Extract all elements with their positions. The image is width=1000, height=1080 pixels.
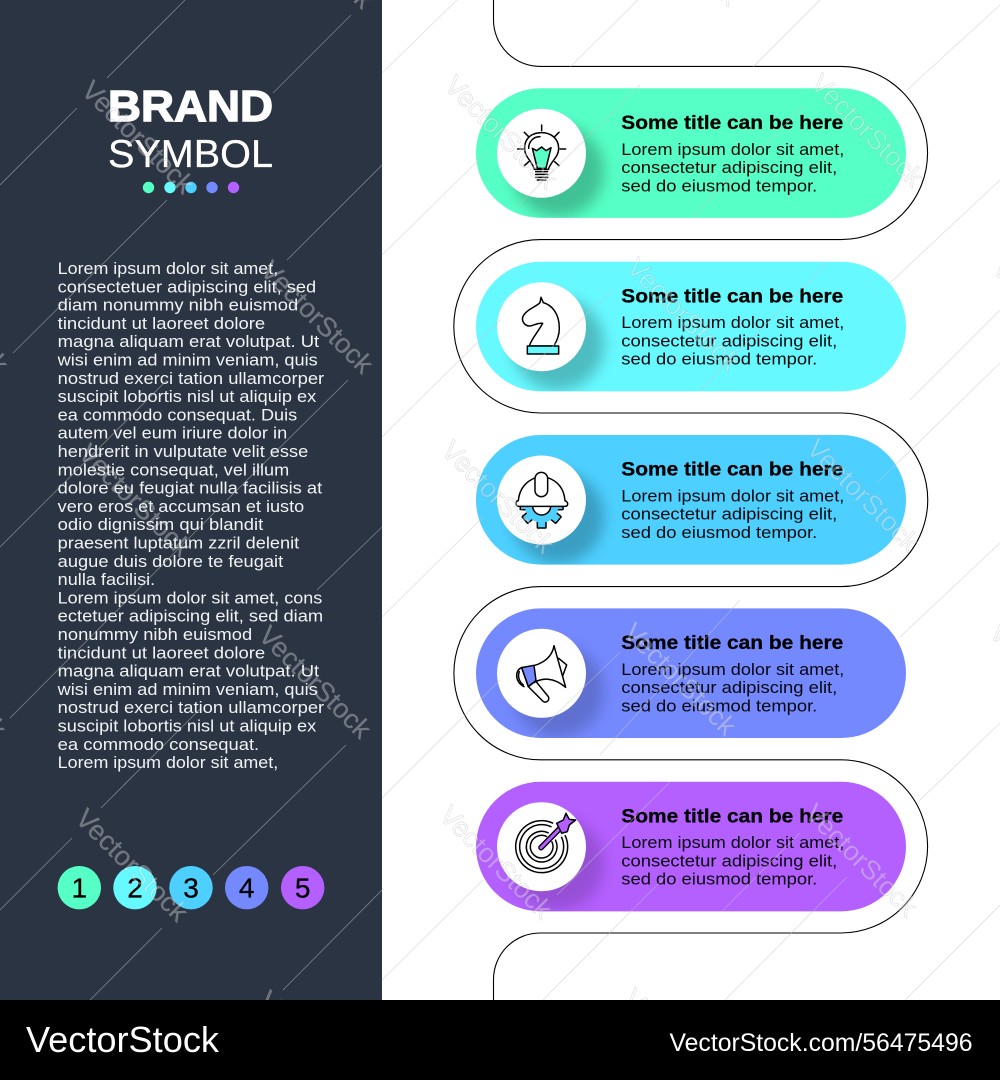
card 4: sed do eiusmod tempor. (621, 697, 817, 715)
text: VectorStock (436, 435, 561, 560)
sidebar body text: hendrerit in vulputate velit esse (58, 443, 308, 461)
card 1: consectetur adipiscing elit, (621, 159, 837, 177)
sidebar body text: suscipit lobortis nisl ut aliquip ex (58, 718, 316, 736)
sidebar body text: autem vel eum iriure dolor in (58, 425, 287, 443)
sidebar body text: nonummy nibh euismod (58, 626, 252, 644)
icon: light bulb (518, 125, 566, 180)
footer bar: VectorStock (26, 1019, 220, 1060)
sidebar body text: Lorem ipsum dolor sit amet, (58, 754, 278, 772)
sidebar body text: ea commodo consequat. (58, 736, 259, 754)
sidebar body text: nulla facilisi. (58, 571, 155, 589)
brand heading (108, 82, 273, 176)
sidebar body text: Lorem ipsum dolor sit amet, (58, 260, 278, 278)
card 3: consectetur adipiscing elit, (621, 506, 837, 524)
sidebar body text: ectetuer adipiscing elit, sed diam (58, 608, 323, 626)
card 5 (476, 782, 906, 911)
sidebar body text: dolore eu feugiat nulla facilisis at (58, 480, 323, 498)
sidebar body text: magna aliquam erat volutpat. Ut (58, 663, 320, 681)
brand heading: BRAND (108, 82, 273, 131)
numbered legend: 4 (239, 873, 254, 904)
icon: megaphone (517, 646, 567, 702)
card 3 (476, 435, 906, 565)
sidebar body text: nostrud exerci tation ullamcorper (58, 699, 325, 717)
text: VectorStock (76, 75, 201, 200)
footer bar: VectorStock.com/56475496 (670, 1029, 972, 1057)
sidebar body text: praesent luptatum zzril delenit (58, 534, 300, 552)
card 1 (476, 88, 906, 218)
icon: chess knight (522, 297, 559, 354)
sidebar body text (57, 260, 325, 772)
card 4 (476, 608, 906, 738)
numbered legend: 2 (127, 873, 143, 904)
text: VectorStock (621, 252, 746, 377)
sidebar body text: ea commodo consequat. Duis (58, 406, 297, 424)
numbered legend: 3 (183, 873, 199, 904)
text: VectorStock (618, 617, 743, 742)
numbered legend (58, 866, 324, 909)
card 1: sed do eiusmod tempor. (621, 177, 817, 195)
text: VectorStock (439, 70, 564, 195)
sidebar body text: Lorem ipsum dolor sit amet, cons (58, 589, 322, 607)
card 1: Some title can be here (621, 112, 843, 134)
footer bar (0, 1000, 1000, 1080)
text: VectorStock (255, 255, 380, 380)
numbered legend: 1 (72, 873, 87, 904)
text: VectorStock (801, 433, 926, 558)
sidebar body text: consectetuer adipiscing elit, sed (58, 278, 316, 296)
card 3: Some title can be here (621, 459, 843, 481)
sidebar body text: magna aliquam erat volutpat. Ut (58, 333, 320, 351)
sidebar body text: augue duis dolore te feugait (58, 553, 284, 571)
brand heading: SYMBOL (108, 133, 273, 176)
sidebar body text: tincidunt ut laoreet dolore (58, 644, 265, 662)
card 4: Lorem ipsum dolor sit amet, (621, 661, 844, 679)
card 5: consectetur adipiscing elit, (621, 852, 837, 870)
sidebar body text: tincidunt ut laoreet dolore (58, 315, 265, 333)
card 5: Lorem ipsum dolor sit amet, (621, 834, 844, 852)
card 5: Some title can be here (621, 805, 843, 827)
card 3: Lorem ipsum dolor sit amet, (621, 487, 844, 505)
icon: target with arrow (516, 813, 576, 873)
text: VectorStock (805, 68, 930, 193)
panel: dark sidebar (0, 0, 382, 1000)
text: VectorStock (73, 438, 198, 563)
card 2: Some title can be here (621, 285, 843, 307)
card 2 (476, 262, 906, 391)
sidebar body text: nostrud exerci tation ullamcorper (58, 370, 325, 388)
sidebar body text: wisi enim ad minim veniam, quis (57, 681, 318, 699)
text: VectorStock (253, 620, 378, 745)
sidebar body text: suscipit lobortis nisl ut aliquip ex (58, 388, 316, 406)
card 3: sed do eiusmod tempor. (621, 524, 817, 542)
text: VectorStock (434, 800, 559, 925)
sidebar body text: diam nonummy nibh euismod (58, 297, 298, 315)
text: VectorStock (799, 798, 924, 923)
card 2: Lorem ipsum dolor sit amet, (621, 314, 844, 332)
sidebar body text: odio dignissim qui blandit (58, 516, 264, 534)
card 4: consectetur adipiscing elit, (621, 679, 837, 697)
icon: helmet and gear (516, 472, 568, 528)
sidebar body text: wisi enim ad minim veniam, quis (57, 352, 318, 370)
sidebar body text: molestie consequat, vel illum (58, 461, 289, 479)
card 1: Lorem ipsum dolor sit amet, (621, 141, 844, 159)
card 2: sed do eiusmod tempor. (621, 351, 817, 369)
connector line snaking behind the cards (454, 0, 928, 1000)
card 2: consectetur adipiscing elit, (621, 332, 837, 350)
sidebar body text: vero eros et accumsan et iusto (58, 498, 304, 516)
colour dots (143, 182, 239, 193)
card 5: sed do eiusmod tempor. (621, 871, 817, 889)
card 4: Some title can be here (621, 632, 843, 654)
text: VectorStock (70, 803, 195, 928)
numbered legend: 5 (295, 873, 310, 904)
